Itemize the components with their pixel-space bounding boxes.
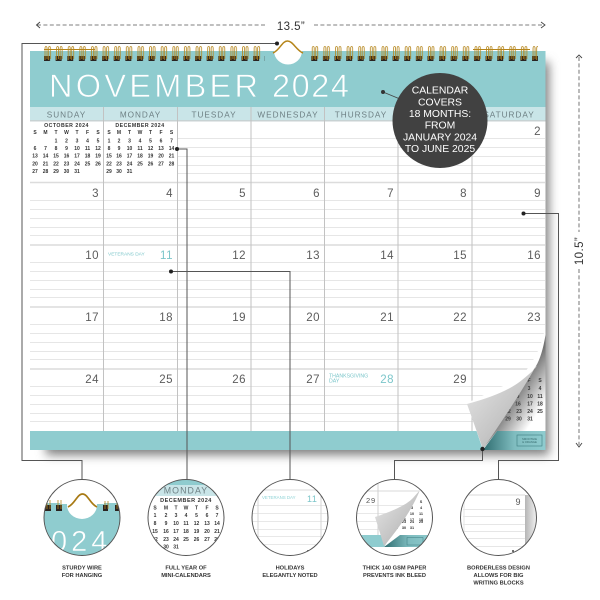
detail circle: thick paper: 11: [419, 512, 423, 516]
date numbers: 9: [534, 188, 541, 200]
mini calendar: December 2024: 4: [139, 138, 142, 144]
page curl revealing next page: [467, 318, 546, 450]
mini calendar: October 2024: F: [86, 130, 89, 136]
mini calendar: October 2024: 12: [95, 146, 101, 152]
caption: sturdy wire: STURDY WIRE: [62, 566, 102, 572]
page curl revealing next page: 22: [505, 409, 511, 415]
caption: sturdy wire: [62, 566, 103, 579]
detail circle: thick paper: 30: [402, 526, 406, 530]
mini calendar: December 2024: 23: [116, 162, 122, 168]
date numbers: 16: [527, 250, 541, 262]
mini calendar: October 2024: 20: [32, 162, 38, 168]
detail circle: mini-calendars: 4: [185, 513, 188, 519]
mini calendar: October 2024: 3: [76, 138, 79, 144]
detail circle: mini-calendars: DECEMBER 2024: [160, 498, 212, 504]
detail circle: thick paper: 25: [419, 520, 423, 524]
caption: mini-calendars: FULL YEAR OF: [165, 566, 207, 572]
mini calendar: December 2024: T: [128, 130, 131, 136]
date numbers: 24: [85, 374, 99, 386]
mini calendar: December 2024: 9: [118, 146, 121, 152]
caption: borderless design: BORDERLESS DESIGN: [467, 566, 530, 572]
mini calendar: December 2024: 10: [127, 146, 132, 152]
mini calendar: October 2024: 23: [64, 162, 69, 168]
date numbers: 26: [232, 374, 246, 386]
detail circle: mini-calendars: S: [153, 506, 157, 512]
caption: holidays: [262, 566, 318, 579]
leader: holidays: [169, 270, 290, 480]
spiral wire binding: [43, 46, 538, 62]
page curl revealing next page: 30: [516, 416, 522, 422]
holiday: Veterans Day: VETERANS DAY: [108, 252, 145, 258]
calendar drop shadow: [46, 62, 549, 455]
detail circle: mini-calendars: 30: [163, 544, 169, 550]
mini calendar: October 2024: S: [33, 130, 37, 136]
mini calendar: October 2024: 22: [53, 162, 59, 168]
page curl revealing next page: 17: [527, 402, 533, 408]
mini calendar: October 2024: 16: [64, 154, 69, 160]
detail circle: mini-calendars: MONDAY: [164, 486, 208, 496]
mini calendar: December 2024: 27: [158, 162, 164, 168]
mini calendar: December 2024: 13: [158, 146, 164, 152]
mini calendar: December 2024: 7: [170, 138, 173, 144]
mini calendar: December 2024: W: [138, 130, 143, 136]
date numbers: 8: [460, 188, 467, 200]
detail circle: mini-calendars: F: [205, 506, 209, 512]
detail circle: mini-calendars: [148, 479, 224, 556]
caption: sturdy wire: FOR HANGING: [62, 573, 103, 579]
detail circle: mini-calendars: 10: [173, 521, 179, 527]
detail circle: thick paper: 3: [411, 506, 413, 510]
callout: 18 months: FROM: [425, 121, 455, 132]
mini calendar: October 2024: 17: [74, 154, 80, 160]
caption: mini-calendars: [161, 566, 211, 579]
mini calendar: October 2024: 14: [43, 154, 48, 160]
mini calendar: October 2024: 27: [32, 169, 38, 175]
detail circle: thick paper: 10: [410, 512, 414, 516]
date numbers: 7: [387, 188, 394, 200]
page curl revealing next page: 31: [527, 416, 533, 422]
detail circle: mini-calendars: 21: [214, 529, 220, 535]
mini calendar: December 2024: 12: [148, 146, 153, 152]
callout: 18 months: COVERS: [418, 97, 462, 108]
page curl revealing next page: 3: [528, 386, 531, 392]
callout: 18 months: [381, 73, 488, 168]
mini calendar: October 2024: 21: [43, 162, 48, 168]
mini calendar: December 2024: 25: [137, 162, 143, 168]
detail circle: thick paper: 29: [366, 496, 376, 505]
header band: month title: [30, 51, 546, 107]
mini calendar: December 2024: 1: [108, 138, 111, 144]
date numbers: 23: [527, 312, 541, 324]
detail circle: mini-calendars: 25: [183, 537, 189, 543]
detail circle: mini-calendars: 20: [204, 529, 210, 535]
page curl revealing next page: 16: [515, 402, 521, 408]
mini calendar: December 2024: 3: [128, 138, 131, 144]
weekday band: [30, 107, 546, 122]
mini calendar: December 2024: S: [107, 130, 111, 136]
detail circle: borderless design: 9: [515, 497, 521, 507]
date numbers: 27: [306, 374, 320, 386]
mini calendar: December 2024: 20: [158, 154, 164, 160]
callout: 18 months: CALENDAR: [412, 86, 469, 96]
detail circle: mini-calendars: 11: [183, 521, 189, 527]
detail circle: thick paper: 16: [402, 518, 406, 522]
mini calendar: December 2024: DECEMBER 2024: [115, 123, 165, 129]
detail circle: holidays: [252, 480, 328, 556]
mini calendar: October 2024: [32, 123, 101, 175]
detail circle: mini-calendars: 16: [163, 529, 169, 535]
page curl revealing next page: SMOOTHIE: [522, 437, 537, 441]
page curl revealing next page: 4: [539, 386, 542, 392]
leader: thick paper: [394, 447, 485, 480]
date numbers: 2: [534, 126, 541, 138]
mini calendar: December 2024: 31: [127, 169, 132, 175]
page curl revealing next page: 10: [527, 394, 533, 400]
detail circle: mini-calendars: 31: [173, 544, 179, 550]
detail circle: thick paper: 17: [410, 518, 414, 522]
mini calendar: December 2024: M: [117, 130, 121, 136]
caption: thick paper: PREVENTS INK BLEED: [363, 573, 426, 579]
mini calendar: December 2024: 21: [169, 154, 174, 160]
date numbers: 17: [85, 312, 99, 324]
mini calendar: October 2024: 18: [85, 154, 90, 160]
calendar page: [30, 51, 546, 450]
detail circle: thick paper: 31: [410, 526, 414, 530]
weekday band: WEDNESDAY: [257, 110, 319, 120]
width dimension: 13.5 inches: 13.5”: [277, 21, 305, 33]
detail circle: borderless design: [460, 480, 537, 556]
mini calendar: October 2024: 13: [32, 154, 38, 160]
detail circle: thick paper: 24: [410, 520, 415, 524]
callout: 18 months: JANUARY 2024: [403, 132, 477, 144]
detail circle: mini-calendars: T: [195, 506, 198, 512]
date numbers: 18: [159, 312, 173, 324]
mini calendar: October 2024: 31: [74, 169, 80, 175]
detail circle: thick paper: 23: [402, 520, 406, 524]
date numbers: 28: [380, 374, 394, 386]
date numbers: 13: [306, 250, 320, 262]
weekday band: SUNDAY: [47, 110, 86, 120]
mini calendar: December 2024: 30: [116, 169, 122, 175]
mini calendar: October 2024: 2: [65, 138, 68, 144]
mini calendar: October 2024: 10: [74, 146, 80, 152]
mini calendar: December 2024: 5: [149, 138, 152, 144]
mini calendar: October 2024: OCTOBER 2024: [44, 123, 89, 129]
header band: month title: 2024: [272, 68, 349, 104]
mini calendar: October 2024: 6: [34, 146, 37, 152]
mini calendar: October 2024: 30: [64, 169, 69, 175]
caption: borderless design: [467, 566, 530, 586]
detail circle: mini-calendars: 24: [173, 537, 179, 543]
callout: 18 months: TO JUNE 2025: [405, 144, 475, 155]
mini calendar: December 2024: 11: [137, 146, 143, 152]
caption: holidays: ELEGANTLY NOTED: [262, 573, 318, 579]
mini calendar: December 2024: 15: [106, 154, 112, 160]
detail circle: mini-calendars: 23: [163, 537, 169, 543]
mini calendar: October 2024: 29: [53, 169, 59, 175]
weekday band: MONDAY: [120, 110, 161, 120]
detail circle: thick paper: [356, 480, 434, 556]
detail circle: mini-calendars: 19: [194, 529, 199, 535]
mini calendar: December 2024: 14: [169, 146, 174, 152]
page curl revealing next page: S: [538, 378, 542, 384]
page curl revealing next page: 9: [517, 394, 520, 400]
detail circle: mini-calendars: M: [164, 506, 168, 512]
hanging notch and wire hook: [268, 38, 308, 64]
date numbers: 5: [239, 188, 246, 200]
mini calendar: October 2024: W: [64, 130, 69, 136]
leader: mini-calendars: [175, 147, 187, 480]
mini calendar: December 2024: 17: [127, 154, 132, 160]
weekday band: TUESDAY: [191, 110, 237, 120]
mini calendar: December 2024: [106, 123, 174, 175]
mini calendar: October 2024: 25: [85, 162, 90, 168]
mini calendar: December 2024: 26: [148, 162, 153, 168]
date numbers: 3: [92, 188, 99, 200]
mini calendar: December 2024: 18: [137, 154, 143, 160]
mini calendar: October 2024: 7: [44, 146, 47, 152]
detail circle: mini-calendars: 6: [206, 513, 209, 519]
page curl revealing next page: 29: [505, 416, 511, 422]
callout: 18 months: 18 MONTHS:: [409, 109, 471, 120]
date numbers: 22: [453, 312, 467, 324]
header band: month title: NOVEMBER: [49, 68, 258, 104]
mini calendar: October 2024: 26: [95, 162, 101, 168]
mini calendar: December 2024: 24: [127, 162, 132, 168]
date numbers: 4: [166, 188, 173, 200]
detail circle: wire hook: [44, 480, 121, 558]
date numbers: 10: [85, 250, 99, 262]
mini calendar: October 2024: M: [43, 130, 48, 136]
width dimension: 13.5 inches: [36, 21, 545, 33]
detail circle: mini-calendars: 14: [214, 521, 220, 527]
mini calendar: December 2024: 2: [118, 138, 121, 144]
date numbers: 19: [232, 312, 246, 324]
mini calendar: December 2024: S: [170, 130, 174, 136]
detail circle: mini-calendars: 9: [165, 521, 168, 527]
detail circle: mini-calendars: 1: [154, 513, 157, 519]
date numbers: 29: [453, 374, 467, 386]
caption: thick paper: [363, 566, 426, 579]
page curl revealing next page: 18: [537, 402, 543, 408]
weekday band: FRIDAY: [417, 110, 453, 120]
mini calendar: December 2024: 29: [106, 169, 112, 175]
detail circle: thick paper: 4: [420, 506, 423, 510]
detail circle: mini-calendars: 5: [195, 513, 198, 519]
mini calendar: October 2024: 28: [43, 169, 48, 175]
mini calendar: October 2024: 9: [65, 146, 68, 152]
date numbers: 20: [306, 312, 320, 324]
date numbers: 6: [313, 188, 320, 200]
date numbers: 14: [380, 250, 394, 262]
detail circle: thick paper: S: [420, 500, 423, 504]
caption: mini-calendars: MINI-CALENDARS: [161, 573, 211, 579]
mini calendar: December 2024: 16: [116, 154, 122, 160]
height dimension: 10.5 inches: [574, 55, 586, 447]
weekday band: THURSDAY: [335, 110, 387, 120]
page curl revealing next page: 25: [537, 409, 543, 415]
page curl revealing next page: & ORANGE: [522, 440, 537, 444]
mini calendar: October 2024: T: [54, 130, 58, 136]
mini calendar: October 2024: 4: [86, 138, 89, 144]
detail circle: thick paper: 29: [394, 526, 398, 530]
detail circle: holidays: 11: [307, 494, 318, 504]
detail circle: wire hook: 024: [51, 526, 111, 558]
mini calendar: October 2024: 5: [97, 138, 100, 144]
leader: sturdy wire: [22, 42, 279, 480]
detail circle: thick paper: F: [411, 500, 414, 504]
detail circle: thick paper: 22: [394, 520, 398, 524]
date numbers: 21: [380, 312, 394, 324]
caption: thick paper: THICK 140 GSM PAPER: [363, 566, 426, 572]
weekday band: SATURDAY: [483, 110, 535, 120]
page curl revealing next page: 24: [527, 409, 533, 415]
detail circle: mini-calendars: 29: [152, 544, 158, 550]
detail circle: mini-calendars: 18: [183, 529, 189, 535]
detail circle: thick paper: 9: [403, 512, 405, 516]
date numbers: 11: [160, 250, 173, 262]
mini calendar: December 2024: 6: [160, 138, 163, 144]
detail circle: mini-calendars: 3: [175, 513, 178, 519]
leader: borderless design: [498, 212, 558, 480]
holiday: Thanksgiving Day: DAY: [329, 378, 340, 384]
detail circle: mini-calendars: 15: [152, 529, 158, 535]
mini calendar: December 2024: 8: [108, 146, 111, 152]
detail circle: mini-calendars: 17: [173, 529, 179, 535]
detail circle: thick paper: 18: [419, 518, 423, 522]
detail circle: mini-calendars: S: [215, 506, 219, 512]
detail circle: mini-calendars: 28: [214, 537, 220, 543]
mini calendar: December 2024: 28: [169, 162, 174, 168]
caption: borderless design: ALLOWS FOR BIG: [474, 573, 524, 579]
detail circle: mini-calendars: 22: [152, 537, 158, 543]
mini calendar: December 2024: F: [159, 130, 163, 136]
mini calendar: October 2024: T: [75, 130, 79, 136]
detail circle: holidays: VETERANS DAY: [262, 495, 296, 500]
detail circle: mini-calendars: 8: [154, 521, 157, 527]
detail circle: mini-calendars: 27: [204, 537, 210, 543]
detail circle: mini-calendars: 2: [165, 513, 168, 519]
mini calendar: October 2024: 15: [53, 154, 59, 160]
mini calendar: October 2024: S: [96, 130, 100, 136]
height dimension: 10.5 inches: 10.5”: [574, 237, 586, 265]
detail circle: mini-calendars: T: [174, 506, 178, 512]
mini calendar: December 2024: 22: [106, 162, 112, 168]
footer band: [30, 431, 546, 450]
mini calendar: October 2024: 19: [95, 154, 101, 160]
date numbers: 15: [453, 250, 467, 262]
date numbers: 25: [159, 374, 173, 386]
page curl revealing next page: 23: [516, 409, 522, 415]
mini calendar: October 2024: 8: [55, 146, 58, 152]
mini calendar: October 2024: 1: [55, 138, 58, 144]
detail circle: mini-calendars: 26: [194, 537, 199, 543]
detail circle: mini-calendars: 7: [216, 513, 219, 519]
date numbers: 12: [232, 250, 246, 262]
caption: holidays: HOLIDAYS: [276, 566, 305, 572]
page curl revealing next page: F: [527, 378, 531, 384]
caption: borderless design: WRITING BLOCKS: [473, 580, 524, 586]
detail circle: mini-calendars: 13: [204, 521, 210, 527]
date numbers: [85, 126, 541, 386]
detail circle: mini-calendars: 12: [194, 521, 199, 527]
holiday: Thanksgiving Day: THANKSGIVING: [329, 374, 368, 380]
mini calendar: December 2024: T: [149, 130, 152, 136]
calendar grid lines: [30, 107, 545, 431]
page curl revealing next page: 11: [537, 394, 543, 400]
mini calendar: October 2024: 11: [85, 146, 90, 152]
mini calendar: December 2024: 19: [148, 154, 153, 160]
detail circle: mini-calendars: W: [184, 506, 189, 512]
mini calendar: October 2024: 24: [74, 162, 80, 168]
